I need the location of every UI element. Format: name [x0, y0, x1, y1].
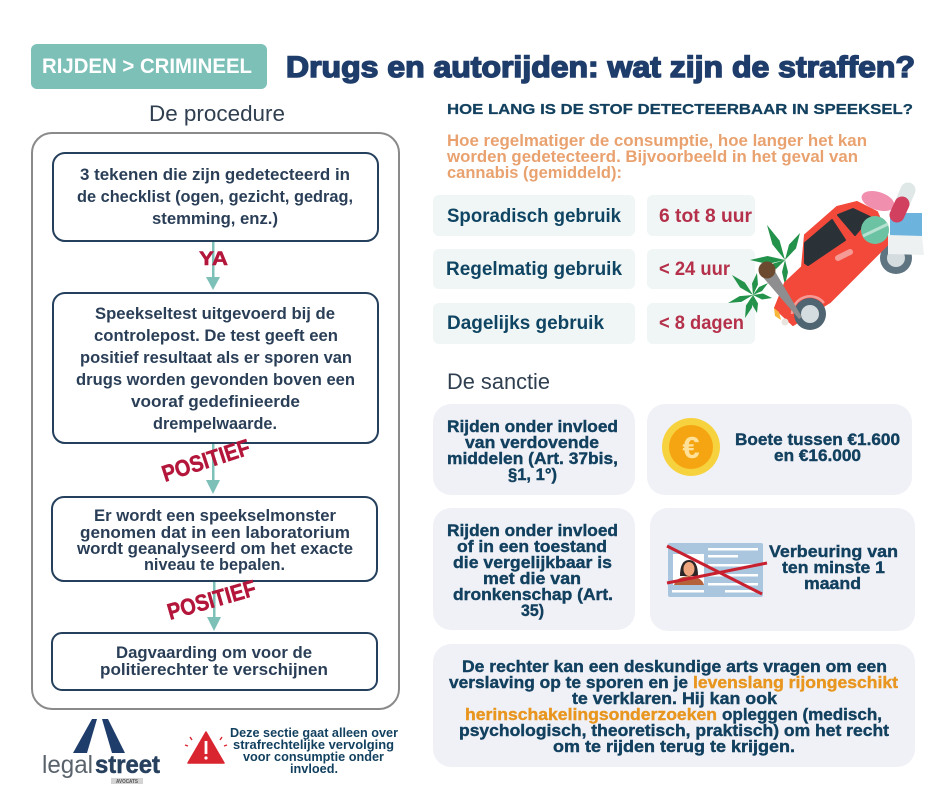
step 2: drempelwaarde.	[153, 414, 277, 433]
logo: legalstreet: street	[95, 751, 161, 779]
step 2: positief resultaat als er sporen van	[80, 348, 352, 367]
arrow: step 3 to step 4	[207, 582, 221, 631]
card: verbeuring: Verbeuring van	[769, 542, 898, 561]
step 4: Dagvaarding om voor de	[116, 643, 312, 662]
card: art. 37bis: van verdovende	[465, 433, 599, 452]
arrow: step 1 to step 2	[206, 241, 220, 290]
card: rechter: De rechter kan een deskundige arts vragen om een	[462, 657, 887, 676]
card: rechter: herinschakelingsonderzoeken	[465, 705, 717, 724]
row: regelmatig gebruik: Regelmatig gebruik	[446, 259, 622, 280]
card: rechter: levenslang rijongeschikt	[693, 673, 898, 692]
card: art. 35: met die van	[483, 569, 581, 588]
icon: euro coin	[662, 418, 720, 476]
category tag: RIJDEN > CRIMINEEL	[42, 55, 252, 78]
card: art. 37bis: Rijden onder invloed	[447, 417, 618, 436]
step 3: wordt geanalyseerd om het exacte	[76, 539, 353, 558]
logo: legalstreet: AVOCATS	[116, 779, 139, 785]
note: scope of section: invloed.	[290, 762, 338, 776]
card: art. 35	[433, 508, 635, 630]
step 1: 3 tekenen die zijn gedetecteerd in	[80, 165, 350, 184]
category tag	[31, 44, 267, 89]
card: rechter: psychologisch, theoretisch, praktisch) om het recht	[459, 721, 889, 740]
card: art. 37bis: §1, 1°)	[508, 465, 557, 484]
card: rechter: te verklaren. Hij kan ook	[572, 689, 778, 708]
card: art. 37bis: middelen (Art. 37bis,	[447, 449, 618, 468]
card: rechter: opleggen (medisch,	[722, 705, 882, 724]
logo: legalstreet	[42, 719, 161, 785]
heading: detection time: HOE LANG IS DE STOF DETECTEERBAAR IN SPEEKSEL?	[447, 101, 913, 118]
step 2	[53, 293, 378, 443]
card: boete	[647, 404, 912, 495]
row: dagelijks gebruik: < 8 dagen	[659, 313, 744, 334]
arrow: step 2 to step 3	[206, 443, 220, 494]
step 2: vooraf gedefinieerde	[131, 392, 300, 411]
intro text: worden gedetecteerd. Bijvoorbeeld in het geval van	[446, 147, 858, 166]
card: verbeuring: maand	[804, 574, 861, 593]
heading: de sanctie: De sanctie	[447, 369, 550, 394]
heading: de procedure: De procedure	[149, 101, 285, 126]
icon: crossed-out driving licence	[667, 543, 767, 597]
row: sporadisch gebruik	[433, 195, 755, 236]
step 3	[52, 497, 377, 581]
step 3: genomen dat in een laboratorium	[80, 523, 350, 542]
intro text	[446, 131, 867, 182]
note: scope of section: strafrechtelijke vervolging	[233, 738, 394, 752]
card: art. 35: 35)	[521, 601, 544, 620]
row: sporadisch gebruik: 6 tot 8 uur	[659, 206, 753, 227]
card: art. 35: die vergelijkbaar is	[453, 553, 612, 572]
card: rechter: om te rijden terug te krijgen.	[553, 737, 795, 756]
title: Drugs en autorijden: wat zijn de straffen?	[286, 51, 915, 84]
illustration: car, drugs and cannabis	[728, 187, 924, 330]
panel: procedure flow	[32, 133, 399, 709]
step 4	[52, 633, 377, 690]
step 2: Speekseltest uitgevoerd bij de	[95, 304, 335, 323]
card: art. 35: Rijden onder invloed	[447, 521, 618, 540]
note: scope of section: Deze sectie gaat alleen over	[230, 726, 398, 740]
card: boete: Boete tussen €1.600	[735, 430, 900, 449]
row: regelmatig gebruik	[433, 249, 755, 289]
logo: legalstreet: legal	[42, 751, 93, 779]
step 2: controlepost. De test geeft een	[94, 326, 338, 345]
row: regelmatig gebruik: < 24 uur	[659, 259, 731, 280]
card: boete: en €16.000	[774, 446, 861, 465]
note: scope of section	[230, 726, 398, 776]
step 1: de checklist (ogen, gezicht, gedrag,	[77, 187, 353, 206]
card: verbeuring: ten minste 1	[782, 558, 885, 577]
label: positief 2: POSITIEF	[164, 575, 259, 625]
intro text: cannabis (gemiddeld):	[447, 163, 622, 182]
step 3: Er wordt een speekselmonster	[94, 506, 336, 525]
intro text: Hoe regelmatiger de consumptie, hoe langer het kan	[447, 131, 867, 150]
icon: warning triangle	[185, 732, 227, 763]
step 2: drugs worden gevonden boven een	[76, 370, 355, 389]
step 4: politierechter te verschijnen	[100, 660, 328, 679]
row: dagelijks gebruik: Dagelijks gebruik	[447, 313, 604, 334]
card: verbeuring	[650, 508, 915, 631]
step 3: niveau te bepalen.	[144, 555, 285, 574]
note: scope of section: voor consumptie onder	[243, 750, 384, 764]
label: ja: YA	[199, 249, 228, 270]
row: sporadisch gebruik: Sporadisch gebruik	[447, 206, 621, 227]
step 1: stemming, enz.)	[152, 209, 278, 228]
card: rechter	[433, 644, 915, 767]
step 1	[53, 153, 378, 241]
card: art. 35: of in een toestand	[457, 537, 607, 556]
row: dagelijks gebruik	[433, 303, 755, 344]
card: art. 35: dronkenschap (Art.	[453, 585, 613, 604]
card: rechter: verslaving op te sporen en je	[449, 673, 688, 692]
icon: euro coin: €	[682, 430, 700, 465]
card: art. 37bis	[433, 404, 635, 495]
label: positief 1: POSITIEF	[159, 434, 253, 487]
